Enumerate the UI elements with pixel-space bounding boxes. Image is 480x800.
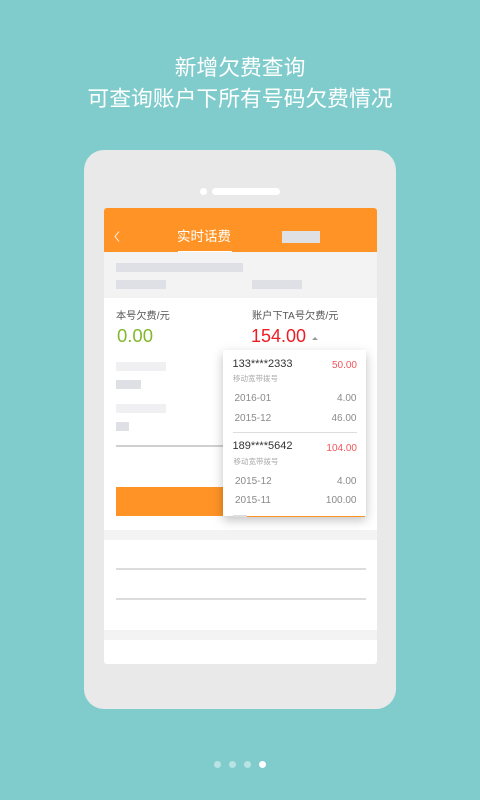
header bar	[104, 208, 377, 252]
dot	[229, 760, 236, 768]
title line 1: 新增欠费查询	[175, 55, 305, 80]
month row: 2015-12	[234, 412, 271, 424]
month amount: 4.00	[337, 392, 356, 404]
active dot	[259, 760, 266, 768]
own debt label: 本号欠费/元	[116, 310, 170, 322]
camera dot	[200, 188, 206, 194]
placeholder bar	[116, 422, 128, 430]
placeholder bar	[116, 362, 166, 371]
number 1: 133****2333	[232, 358, 292, 370]
account debt amount: 154.00	[251, 326, 306, 346]
placeholder bar	[116, 280, 166, 289]
page indicator	[214, 761, 266, 768]
placeholder bar	[116, 263, 242, 272]
month row: 2015-12	[235, 476, 272, 486]
active tab label: 实时话费	[177, 228, 231, 244]
title line 2: 可查询账户下所有号码欠费情况	[87, 86, 393, 111]
section gap	[104, 530, 377, 540]
month amount: 4.00	[337, 476, 356, 486]
number 1 total: 50.00	[332, 360, 357, 370]
collapse arrow	[312, 336, 318, 340]
placeholder bar	[116, 380, 141, 388]
title	[87, 55, 393, 111]
number 1 type: 移动宽带拨号	[233, 374, 278, 382]
phone mockup	[84, 150, 396, 709]
number 2: 189****5642	[232, 440, 292, 452]
popup bottom notch	[233, 515, 247, 517]
app screen	[104, 208, 377, 664]
dot	[244, 760, 251, 768]
dot	[214, 760, 221, 768]
placeholder bar	[116, 404, 166, 413]
month row: 2015-11	[235, 495, 271, 506]
month row: 2016-01	[234, 392, 271, 404]
month amount: 46.00	[331, 412, 356, 424]
section gap	[104, 630, 377, 640]
placeholder bar	[252, 280, 302, 289]
placeholder tab	[282, 231, 320, 243]
month amount: 100.00	[326, 495, 356, 506]
popup bottom edge	[247, 516, 365, 517]
speaker bar	[212, 188, 280, 194]
debt detail popup	[222, 350, 366, 516]
orange action button	[116, 487, 366, 516]
back chevron	[114, 231, 120, 242]
active tab underline	[178, 250, 232, 252]
own debt amount: 0.00	[117, 324, 153, 346]
number 2 total: 104.00	[326, 442, 357, 454]
account info band	[104, 252, 377, 298]
account debt label: 账户下TA号欠费/元	[252, 310, 338, 322]
number 2 type: 移动宽带拨号	[234, 457, 278, 466]
